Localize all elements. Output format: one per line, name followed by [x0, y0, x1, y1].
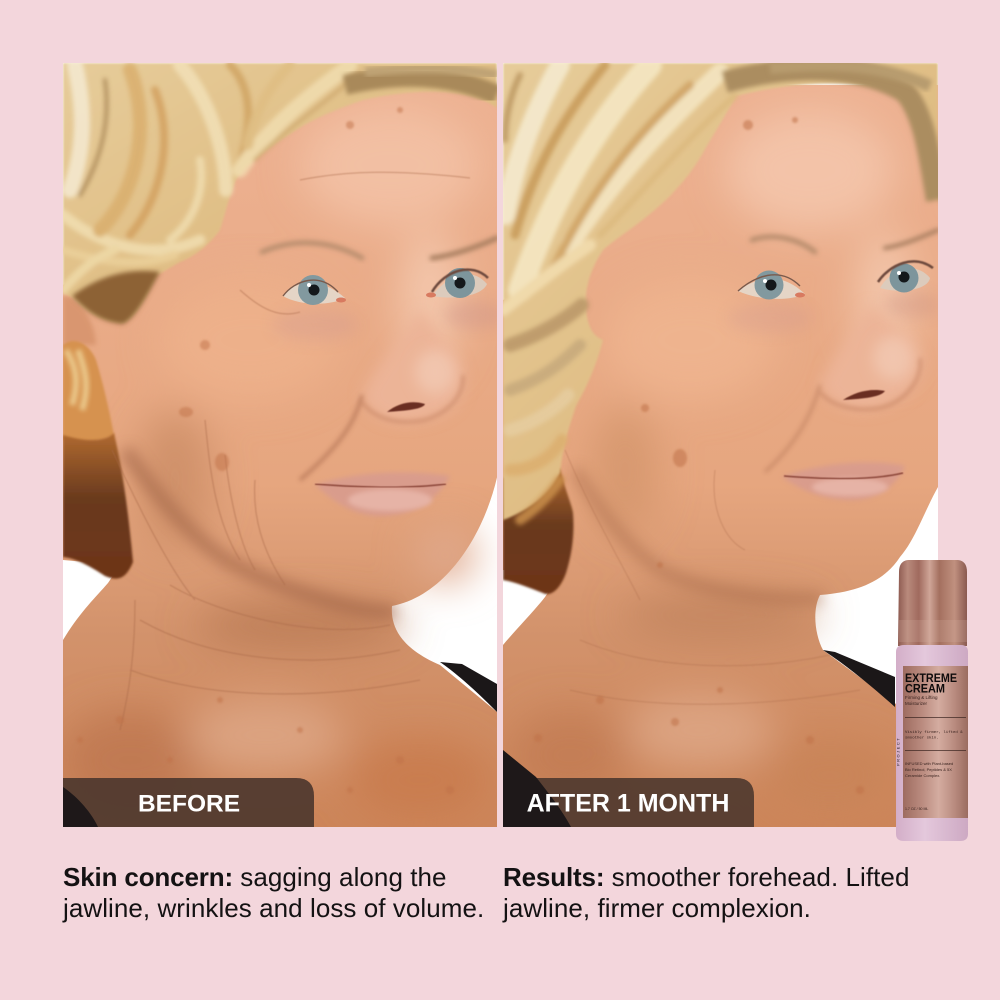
jaw shadow	[575, 470, 822, 599]
ear	[63, 295, 96, 345]
wrinkles	[112, 172, 470, 730]
before label	[63, 778, 314, 827]
bottle label text: 1.7 OZ / 50 ML	[905, 807, 928, 811]
brows	[752, 230, 938, 252]
bottle label text: Bio Retinol, Peptides & 5X	[905, 767, 952, 772]
bottle label	[903, 666, 968, 818]
lips	[782, 462, 905, 500]
skin: face neck and chest	[503, 85, 938, 827]
bottle label text: Moisturizer	[905, 701, 928, 706]
hair lower auburn	[63, 433, 133, 579]
after label	[503, 750, 754, 827]
bottle label text: EXTREME	[905, 673, 957, 685]
jaw shadow	[125, 450, 395, 612]
eye left	[282, 275, 346, 334]
hair strands	[503, 65, 735, 520]
after label: AFTER 1 MONTH	[527, 790, 729, 818]
freckles	[79, 106, 404, 792]
brows	[262, 238, 497, 258]
bottle label text: CREAM	[905, 684, 945, 696]
caption: skin concern: Skin concern: sagging along the	[63, 862, 447, 892]
panel: before photo	[60, 63, 505, 827]
bottle label text: INFUSED with Plant-based	[905, 761, 953, 766]
nose	[362, 310, 464, 423]
hair blonde	[63, 63, 497, 323]
black strap	[440, 662, 497, 712]
eye left	[738, 270, 805, 320]
bottle brand: PROJECT	[896, 737, 900, 766]
bottle label text	[905, 673, 966, 811]
hair lower auburn	[503, 468, 573, 594]
panel: after photo	[503, 63, 940, 827]
before label: BEFORE	[138, 790, 240, 818]
black strap	[823, 650, 895, 707]
bottle body	[896, 645, 968, 841]
bottle label text: smoother skin.	[905, 736, 939, 740]
nose	[820, 305, 921, 410]
freckles	[534, 117, 864, 794]
nasolabial fold	[765, 385, 820, 472]
product: Extreme Cream bottle	[896, 560, 968, 841]
bottle label text: Ceramide Complex.	[905, 773, 940, 778]
bottle cap	[898, 560, 967, 646]
hair strands	[63, 65, 360, 290]
caption: results: jawline, firmer complexion.	[503, 893, 811, 923]
wrinkles	[565, 450, 860, 704]
eye right	[426, 268, 496, 326]
skin: face neck and chest	[63, 90, 500, 827]
bottle label text: Visibly firmer, lifted &	[905, 730, 963, 735]
hair lower orange	[63, 341, 114, 442]
bottle label text: Firming & Lifting	[905, 695, 938, 700]
caption: skin concern: jawline, wrinkles and loss of volume.	[63, 893, 484, 923]
caption: skin concern	[62, 862, 484, 923]
hair under fold	[72, 271, 160, 324]
caption: results: Results: smoother forehead. Lifted	[503, 862, 909, 892]
eye right	[878, 261, 940, 318]
caption: results	[502, 862, 909, 923]
nasolabial fold	[300, 395, 362, 480]
lips	[315, 472, 450, 516]
hair blonde	[503, 63, 938, 520]
